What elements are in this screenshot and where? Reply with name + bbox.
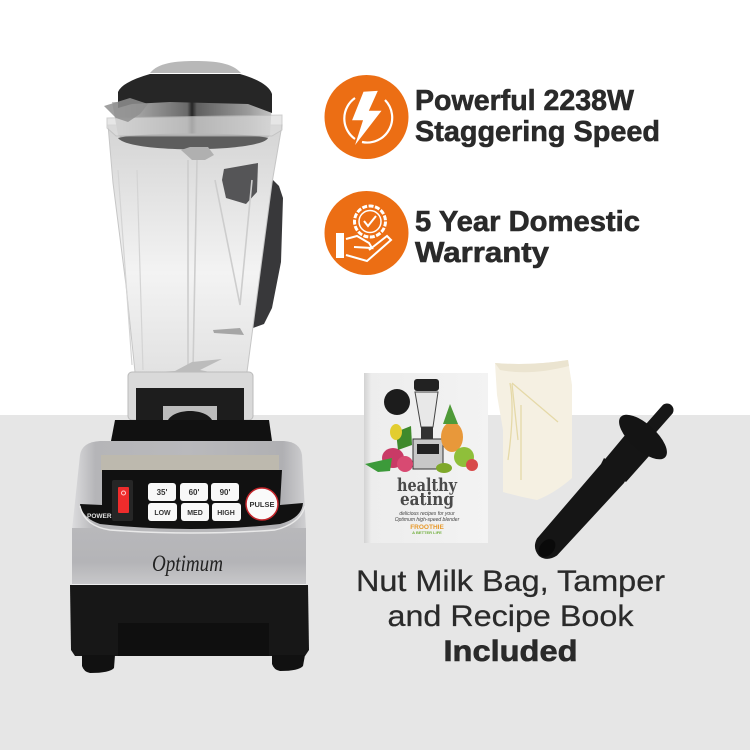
tamper — [535, 407, 674, 560]
blender — [70, 61, 309, 673]
recipe book — [364, 373, 488, 543]
accessories caption: Included — [444, 635, 578, 668]
accessories caption: and Recipe Book — [388, 600, 635, 633]
book tagline: A BETTER LIFE — [412, 530, 442, 535]
control buttons: 60' — [189, 488, 199, 497]
power switch — [112, 480, 133, 521]
power label: POWER — [87, 513, 112, 520]
pulse button: PULSE — [249, 500, 275, 509]
control buttons: 35' — [157, 488, 167, 497]
book subtitle: delicious recipes for your — [399, 511, 455, 517]
heading: warranty — [415, 206, 640, 269]
heading: power — [415, 85, 660, 148]
feature: power — [324, 75, 660, 159]
jar body — [107, 102, 282, 376]
control buttons: MED — [187, 510, 203, 517]
book title: healthy — [397, 475, 457, 496]
motor base collar — [111, 420, 272, 441]
control buttons — [148, 483, 241, 521]
jar lid — [104, 61, 272, 122]
jar handle — [250, 177, 283, 328]
nut milk bag — [495, 360, 572, 500]
heading: power: Powerful 2238W — [415, 85, 634, 117]
book subtitle: Optimum high-speed blender — [395, 517, 460, 523]
brand script: Optimum — [152, 551, 223, 576]
icon: lightning bolt — [324, 75, 408, 159]
accessories caption: Nut Milk Bag, Tamper — [356, 565, 665, 598]
icon: warranty hand — [324, 191, 408, 275]
badge — [384, 389, 410, 415]
book logo: FROOTHIE — [410, 524, 444, 531]
motor base black bottom — [70, 585, 309, 673]
mini blender — [413, 379, 443, 469]
jar base mount — [128, 372, 253, 420]
heading: warranty: 5 Year Domestic — [415, 206, 640, 238]
control buttons: 90' — [220, 488, 230, 497]
motor base silver body — [72, 441, 306, 586]
pulse button — [246, 488, 278, 520]
control buttons: HIGH — [217, 510, 235, 517]
fruit illustration — [365, 404, 478, 473]
feature: warranty — [324, 191, 640, 275]
accessories caption — [356, 565, 665, 668]
book title: eating — [400, 489, 454, 510]
heading: warranty: Warranty — [415, 237, 549, 269]
heading: power: Staggering Speed — [415, 116, 660, 148]
control buttons: LOW — [154, 510, 171, 517]
